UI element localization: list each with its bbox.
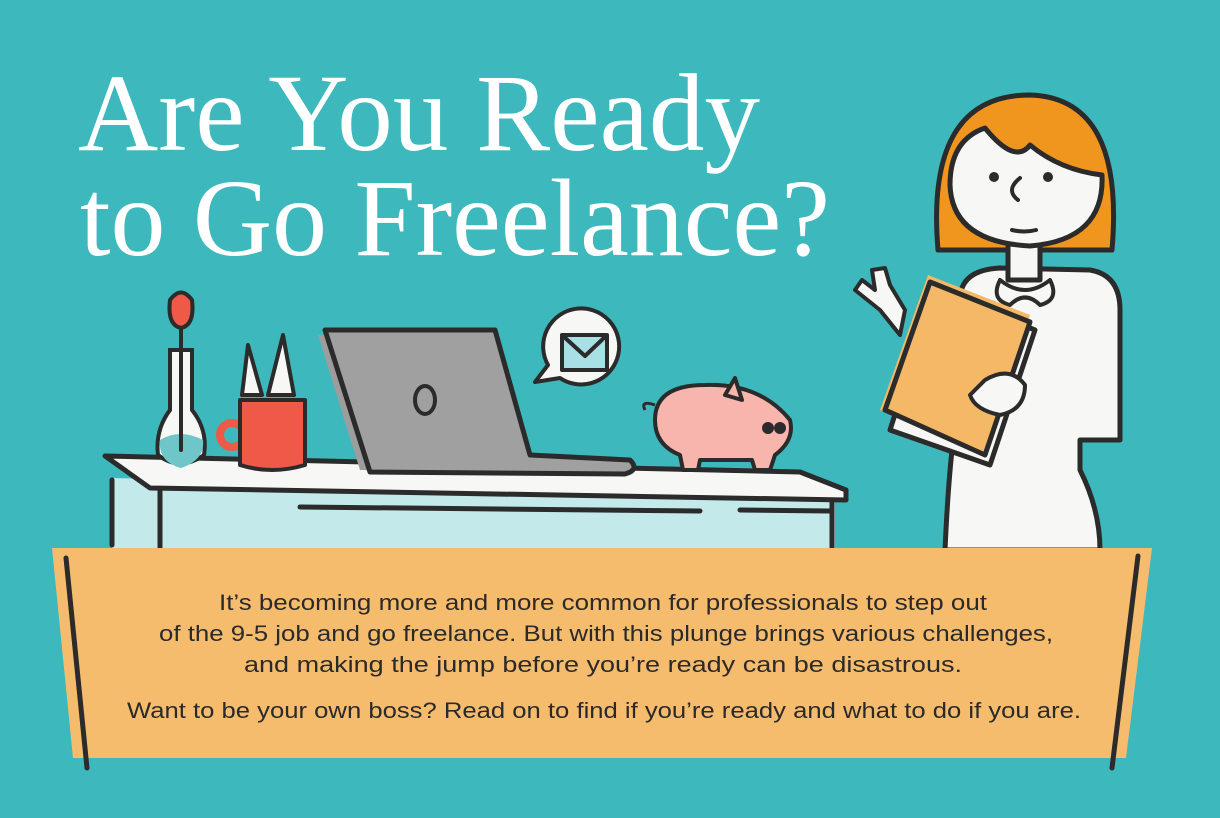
- icon: laptop: [318, 330, 634, 475]
- intro text: and making the jump before you’re ready can be disastrous.: [244, 652, 962, 677]
- title: to Go Freelance?: [80, 157, 830, 279]
- icon: pencil cup: [220, 335, 305, 470]
- intro text: of the 9-5 job and go freelance. But with this plunge brings various challenges,: [159, 621, 1053, 646]
- icon: email speech bubble: [535, 308, 619, 384]
- icon: piggy bank: [644, 378, 791, 470]
- intro text: [127, 590, 1081, 723]
- illustration: woman with folder: [855, 95, 1120, 550]
- intro text: It’s becoming more and more common for professionals to step out: [219, 590, 987, 615]
- desk: [105, 456, 846, 560]
- title: Are You Ready: [78, 52, 760, 174]
- intro text: Want to be your own boss? Read on to find if you’re ready and what to do if you are.: [127, 698, 1081, 723]
- title: [78, 52, 830, 279]
- icon: vase with flower: [158, 292, 205, 468]
- banner: [52, 548, 1152, 768]
